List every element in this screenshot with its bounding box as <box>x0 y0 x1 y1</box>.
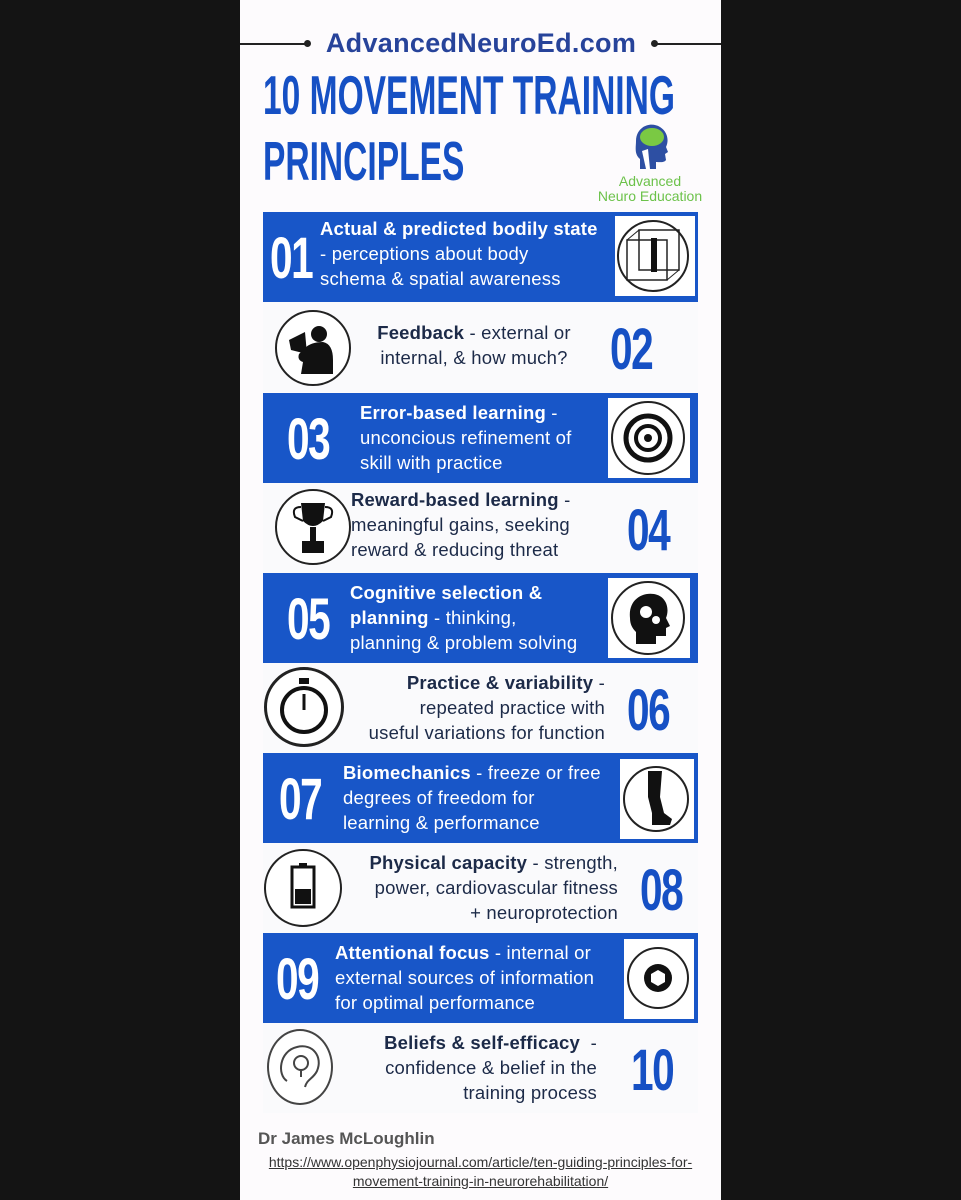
header line left <box>240 43 308 45</box>
row 05: planning - thinking, <box>350 607 516 628</box>
title: PRINCIPLES <box>263 130 464 192</box>
row 10: confidence & belief in the <box>385 1057 597 1078</box>
row 01: - perceptions about body <box>320 243 528 264</box>
row 10: Beliefs & self-efficacy - <box>384 1032 597 1053</box>
row 03: 03 <box>287 407 329 472</box>
panel: infographic background <box>240 0 721 1200</box>
row 05: planning & problem solving <box>350 632 577 653</box>
row 10: 10 <box>631 1038 673 1103</box>
row 04: meaningful gains, seeking <box>351 514 570 535</box>
row 03: unconcious refinement of <box>360 427 572 448</box>
row 05 <box>263 573 698 663</box>
row 07: Biomechanics - freeze or free <box>343 762 601 783</box>
row 06 <box>263 663 698 753</box>
row 04: reward & reducing threat <box>351 539 558 560</box>
logo <box>598 124 702 204</box>
icon: target <box>608 398 690 478</box>
row 06: 06 <box>627 678 669 743</box>
row 04: Reward-based learning - <box>351 489 570 510</box>
row 10: training process <box>463 1082 597 1103</box>
row 09: for optimal performance <box>335 992 535 1013</box>
row 01 <box>263 212 698 302</box>
row 08: Physical capacity - strength, <box>370 852 618 873</box>
icon: battery <box>264 849 342 927</box>
row 07: 07 <box>279 767 321 832</box>
row 05: 05 <box>287 587 329 652</box>
row 06: Practice & variability - <box>407 672 605 693</box>
row 01: 01 <box>270 226 312 291</box>
icon: body in cube <box>615 216 695 296</box>
row 09: external sources of information <box>335 967 594 988</box>
footer: author: Dr James McLoughlin <box>258 1129 435 1148</box>
row 08: 08 <box>640 858 682 923</box>
icon: focus <box>624 939 694 1019</box>
icon: head gears <box>608 578 690 658</box>
logo: Advanced <box>619 173 681 189</box>
row 06: useful variations for function <box>369 722 605 743</box>
row 02: internal, & how much? <box>380 347 568 368</box>
row 09 <box>263 933 698 1023</box>
row 08: power, cardiovascular fitness <box>375 877 618 898</box>
row 04 <box>263 483 698 573</box>
row 08 <box>263 843 698 933</box>
row 02 <box>263 302 698 392</box>
row 03: skill with practice <box>360 452 503 473</box>
icon: stopwatch <box>264 667 344 747</box>
footer: reference link: https://www.openphysiojournal.com/article/ten-guiding-principles-for- <box>269 1154 692 1170</box>
row 02: 02 <box>610 317 652 382</box>
footer: reference link: movement-training-in-neurorehabilitation/ <box>353 1173 608 1189</box>
row 07: learning & performance <box>343 812 540 833</box>
row 05: Cognitive selection & <box>350 582 542 603</box>
row 04: 04 <box>627 498 669 563</box>
row 10 <box>263 1023 698 1113</box>
row 03 <box>263 393 698 483</box>
row 08: + neuroprotection <box>470 902 618 923</box>
icon: trophy <box>275 489 351 565</box>
row 09: Attentional focus - internal or <box>335 942 591 963</box>
icon: leg <box>620 759 694 839</box>
logo: Neuro Education <box>598 188 702 204</box>
row 02: Feedback - external or <box>377 322 571 343</box>
title <box>263 64 675 192</box>
row 01: Actual & predicted bodily state <box>320 218 598 239</box>
website heading: AdvancedNeuroEd.com <box>326 28 636 58</box>
title: 10 MOVEMENT TRAINING <box>263 64 675 126</box>
row 03: Error-based learning - <box>360 402 558 423</box>
icon: feedback <box>275 310 351 386</box>
row 01: schema & spatial awareness <box>320 268 561 289</box>
row 07 <box>263 753 698 843</box>
row 07: degrees of freedom for <box>343 787 535 808</box>
icon: head lightbulb <box>267 1029 333 1105</box>
footer: reference link <box>268 1154 692 1189</box>
row 06: repeated practice with <box>420 697 605 718</box>
row 09: 09 <box>276 947 318 1012</box>
